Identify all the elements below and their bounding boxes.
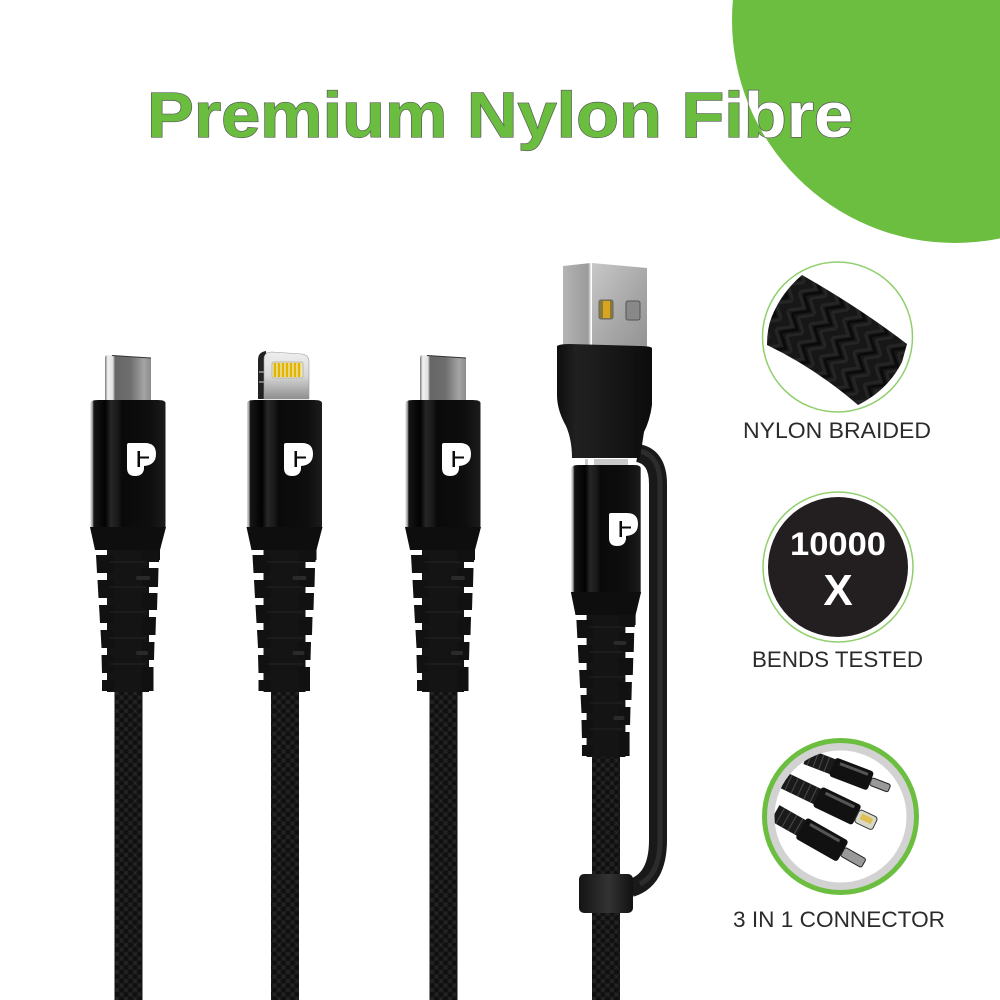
- USB-A plug: [563, 263, 647, 346]
- cable clip: [579, 874, 633, 913]
- cable 1: USB-C: [90, 355, 166, 1000]
- green corner circle: [732, 0, 1000, 243]
- lightning connector: [258, 351, 309, 399]
- black adapter: [557, 344, 652, 458]
- mini cable bottom: [774, 805, 866, 868]
- mini cable top: [803, 754, 891, 792]
- badge: 10000 x bends tested: [752, 492, 923, 672]
- cable 2: Lightning: [246, 351, 322, 1000]
- cable 3: USB-C: [405, 355, 481, 1000]
- label: NYLON BRAIDED: [743, 418, 931, 443]
- number: 10000: [790, 526, 886, 562]
- braided cable swatch: [767, 275, 907, 405]
- side wire: [631, 451, 660, 888]
- multiplier: X: [823, 566, 853, 615]
- metal ring: [585, 459, 628, 465]
- badge: nylon braided: [743, 262, 931, 443]
- title: Premium Nylon Fibre: [147, 79, 853, 151]
- mini cables photo: [774, 754, 891, 868]
- title: Premium Nylon Fibre: [147, 79, 853, 151]
- mini cable middle: [780, 774, 878, 830]
- label: 3 IN 1 CONNECTOR: [733, 907, 945, 932]
- badge: 3 in 1 connector: [733, 740, 945, 932]
- label: BENDS TESTED: [752, 647, 923, 672]
- cable 4: USB-A adapter cable: [557, 263, 660, 1000]
